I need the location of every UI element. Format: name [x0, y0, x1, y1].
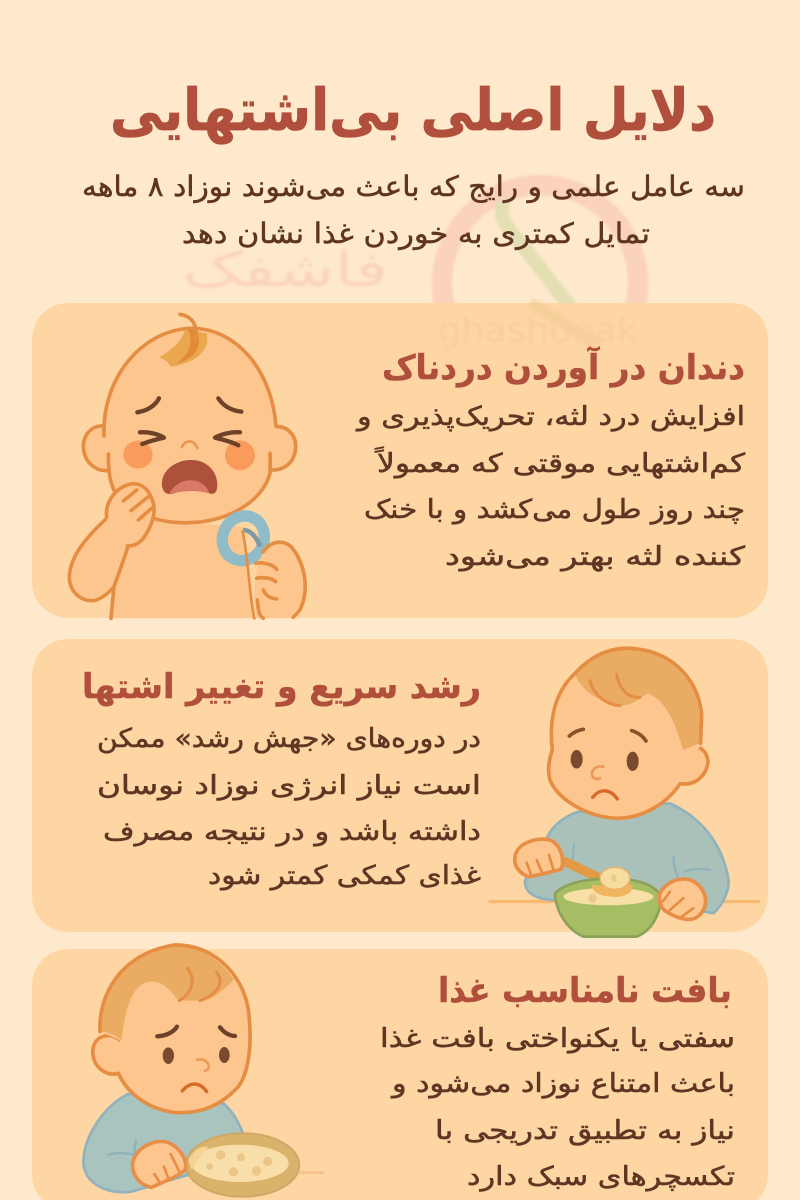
watermark on card: ghashoqak — [438, 311, 639, 351]
panel: teething — [32, 303, 768, 618]
title: دلایل اصلی بی‌اشتهایی — [110, 76, 716, 145]
head — [549, 648, 702, 818]
hand — [133, 1141, 186, 1187]
spoon — [565, 862, 597, 877]
left hand — [106, 484, 154, 545]
eyebrows — [569, 729, 583, 736]
head — [100, 945, 250, 1113]
subtitle: سه عامل علمی و رایج که باعث می‌شوند نوزاد ۸ ماهه — [82, 170, 745, 203]
text block: texture: سفتی یا یکنواختی بافت غذا — [380, 1024, 735, 1054]
text block: teething: کننده لثه بهتر می‌شود — [445, 542, 746, 572]
text block: teething: چند روز طول می‌کشد و با خنک — [364, 495, 745, 525]
hand left — [515, 839, 563, 877]
text block: growth: داشته باشد و در نتیجه مصرف — [103, 817, 481, 847]
text block: teething: کم‌اشتهایی موقتی که معمولاً — [374, 446, 746, 479]
mouth — [162, 460, 217, 494]
ear left — [83, 426, 108, 471]
eyes — [163, 1047, 174, 1064]
hair — [575, 649, 700, 750]
hand right — [659, 879, 706, 919]
cheeks — [123, 441, 153, 469]
text block: texture: باعث امتناع نوزاد می‌شود و — [390, 1069, 735, 1099]
head — [104, 328, 276, 523]
text block: texture: نیاز به تطبیق تدریجی با — [435, 1116, 735, 1146]
food on spoon — [592, 884, 633, 897]
hair — [159, 329, 207, 367]
bowl — [186, 1133, 299, 1197]
text block: growth: است نیاز انرژی نوزاد نوسان — [97, 771, 481, 801]
icon: baby with green bowl — [490, 648, 758, 937]
teether ring — [215, 509, 272, 568]
text block: teething: افزایش درد لثه، تحریک‌پذیری و — [355, 402, 745, 432]
heading: texture: بافت نامناسب غذا — [438, 971, 732, 1011]
eyes — [571, 750, 583, 769]
icon: teething baby — [69, 314, 305, 618]
text block: texture — [380, 1024, 735, 1192]
eyes — [140, 432, 164, 444]
bowl — [555, 879, 662, 937]
text block: growth: غذای کمکی کمتر شود — [208, 861, 481, 891]
panel: growth — [32, 639, 768, 937]
hair — [101, 946, 234, 1040]
watermark: ring and logotype: فاشفک — [182, 242, 388, 298]
ear — [680, 746, 708, 784]
ear right — [271, 427, 296, 470]
heading: growth: رشد سریع و تغییر اشتها — [82, 667, 481, 707]
eyebrows — [137, 398, 159, 412]
text block: texture: تکسچرهای سبک دارد — [467, 1162, 735, 1192]
panel: texture — [32, 945, 768, 1200]
icon: baby with beige bowl — [83, 945, 323, 1197]
ear — [93, 1036, 120, 1074]
watermark: ring and logotype — [182, 185, 638, 381]
subtitle: تمایل کمتری به خوردن غذا نشان دهد — [182, 217, 650, 250]
eyebrows — [157, 1027, 177, 1036]
text block: growth: در دوره‌های «جهش رشد» ممکن — [97, 724, 481, 754]
text block: growth — [97, 724, 481, 891]
right hand — [255, 542, 305, 618]
heading: teething: دندان در آوردن دردناک — [382, 346, 745, 388]
subtitle — [82, 170, 745, 250]
text block: teething — [355, 402, 746, 572]
